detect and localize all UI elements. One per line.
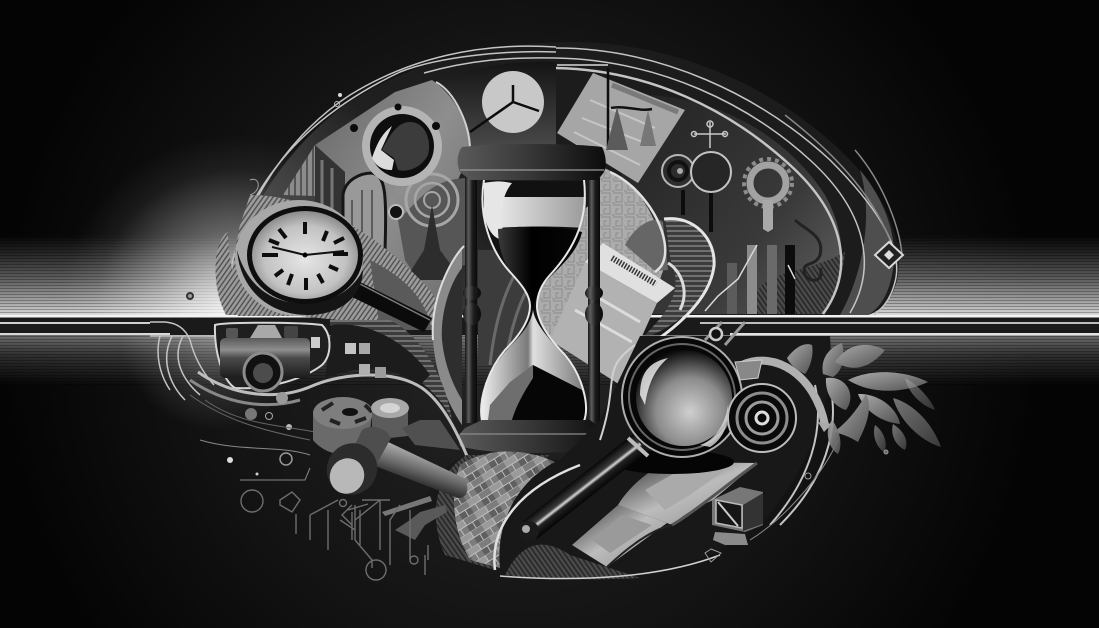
left clock with handle bbox=[235, 200, 432, 332]
panel: left mechanical arches bbox=[283, 80, 470, 320]
circuit lines bbox=[241, 490, 428, 580]
panel: right emblem field bbox=[620, 95, 845, 314]
outer swirl lines bbox=[150, 46, 902, 400]
concentric circle emblem bbox=[728, 384, 796, 452]
leaves bbox=[787, 343, 941, 454]
diamond emblem bbox=[875, 242, 903, 268]
cube bbox=[712, 487, 763, 545]
panel: top clock bbox=[436, 62, 556, 152]
arched ribbon with arrow bbox=[735, 360, 832, 432]
magnifying glass bbox=[519, 337, 742, 541]
diamond and small marks under book bbox=[705, 450, 888, 562]
icon: rings and cross bbox=[662, 121, 731, 232]
sparkles and small ornaments bbox=[186, 93, 342, 480]
document with scales bbox=[557, 64, 685, 183]
horizontal light band bbox=[0, 120, 1099, 435]
left clock magnifier swoosh bbox=[215, 195, 442, 330]
broken portrait medallion bbox=[350, 104, 442, 186]
gear block bbox=[313, 397, 460, 455]
base bbox=[458, 420, 607, 453]
hourglass bbox=[458, 144, 607, 453]
open book bbox=[572, 462, 757, 567]
blob: upper backdrop bbox=[229, 42, 899, 315]
lower blob bbox=[414, 336, 838, 579]
right swirl and maze backdrop bbox=[533, 165, 714, 385]
icon: gear key bbox=[744, 159, 792, 232]
top cap bbox=[458, 144, 606, 180]
camera panel bbox=[190, 320, 467, 456]
bar chart bbox=[705, 220, 821, 314]
gavel bbox=[317, 427, 467, 540]
left foliage behind hourglass bbox=[433, 246, 538, 425]
connector ring on horizon bbox=[705, 322, 745, 345]
glass bulbs bbox=[481, 180, 586, 421]
columns bbox=[463, 178, 603, 423]
